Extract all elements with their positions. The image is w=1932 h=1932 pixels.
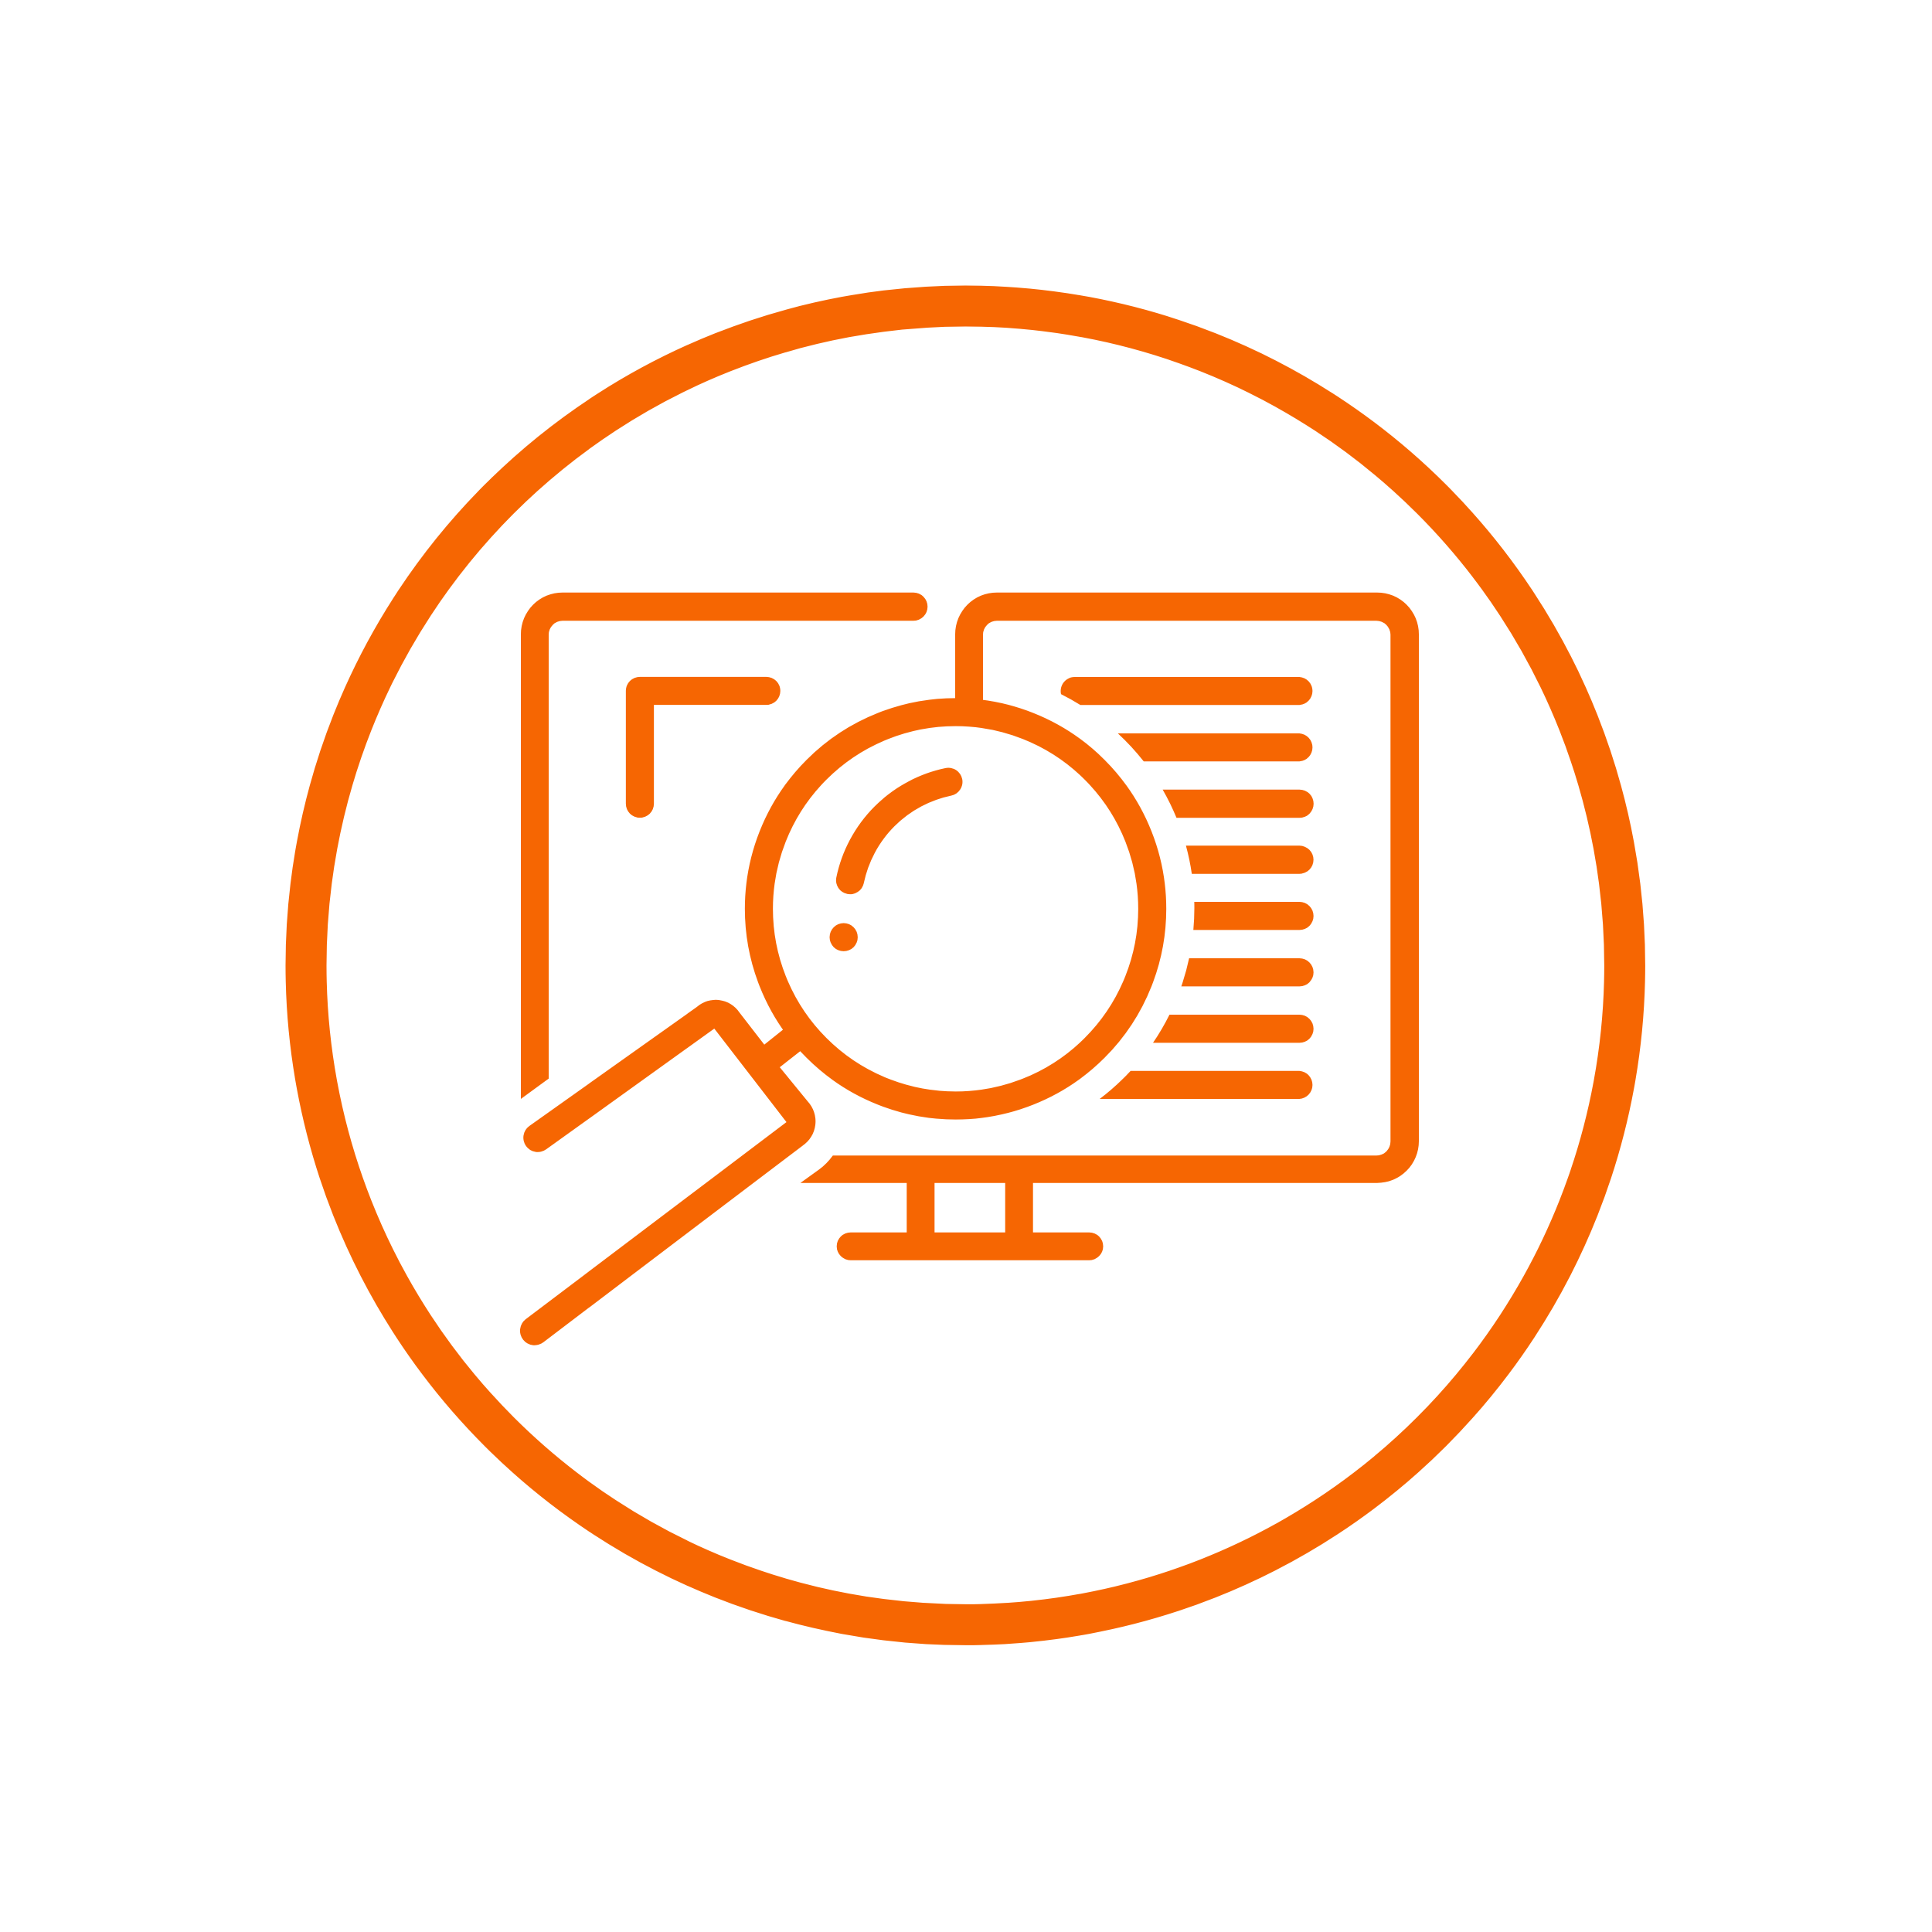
lens glare dot — [830, 923, 858, 951]
magnifying glass lens ring — [759, 713, 1152, 1105]
lens glare arc — [850, 782, 948, 880]
line 6 — [1182, 958, 1314, 986]
line 8 — [1100, 1071, 1312, 1099]
line 1 — [1061, 677, 1312, 705]
line 7 — [1153, 1015, 1314, 1043]
line 5 — [1193, 902, 1314, 930]
line 4 — [1186, 845, 1314, 874]
monitor: left frame section — [521, 593, 927, 1099]
corner bracket line at upper left of screen — [640, 691, 767, 804]
outer circle ring — [306, 306, 1624, 1624]
line 3 — [1162, 790, 1314, 818]
monitor: right frame, stand and base — [801, 593, 1419, 1260]
line 2 — [1117, 733, 1312, 761]
list of text lines on screen — [1061, 677, 1314, 1099]
magnifying glass handle — [520, 1000, 815, 1345]
